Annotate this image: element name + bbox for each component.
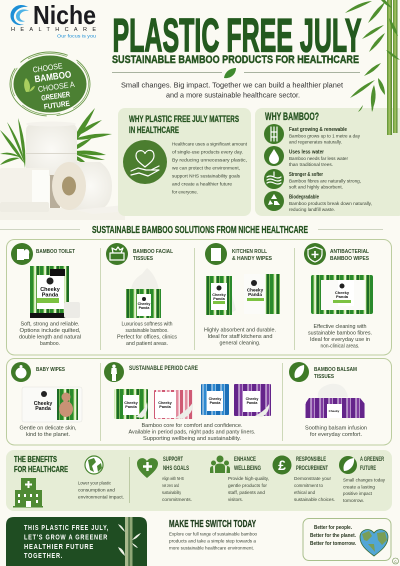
product: kitchen roll and handy wipes: Panda [213, 297, 226, 301]
product: bamboo facial tissues [106, 243, 178, 347]
logo: Niche Healthcare [10, 0, 97, 38]
logo: Niche Healthcare: HEALTHCARE [11, 27, 96, 33]
body text: we can protect the environment, [172, 166, 240, 172]
product: bamboo toilet: Cheeky [40, 287, 61, 293]
product: antibacterial bamboo wipes: Cheeky [335, 290, 350, 295]
benefit: stronger and softer: Stronger & softer [289, 172, 323, 178]
panel: why bamboo [255, 108, 400, 216]
product: kitchen roll and handy wipes [204, 243, 280, 346]
benefit: a greener future: Small changes today [343, 478, 386, 484]
product: antibacterial bamboo wipes: Effective cleaning with [314, 324, 367, 330]
benefit: biodegradable: reducing landfill waste. [289, 207, 335, 213]
heading: FOR HEALTHCARE [14, 464, 68, 474]
product: kitchen roll and handy wipes: Highly absorbent and durable. [204, 328, 276, 334]
product: sustainable period care: Bamboo core for comfort and confidence. [142, 423, 242, 429]
product: antibacterial bamboo wipes: BAMBOO WIPES [330, 256, 369, 262]
product: bamboo facial tissues: BAMBOO FACIAL [133, 249, 173, 255]
benefit: a greener future [339, 456, 386, 504]
benefit: support NHS goals: sustainability [162, 490, 181, 496]
intro text: Small changes. Big impact. Together we can build a healthier planet [121, 82, 343, 90]
bamboo leaves behind rolls [0, 108, 112, 168]
benefit: a greener future: tomorrow. [343, 498, 364, 504]
product: sustainable period care: Panda [125, 405, 138, 409]
benefit: biodegradable: Biodegradable [289, 194, 319, 200]
icon: heart globe [360, 530, 388, 556]
callout: better for people: Better for the planet. [310, 533, 357, 539]
callout: better for people: Better for people. [314, 525, 353, 531]
icon: hospital [13, 478, 43, 508]
make the switch today: products and take a simple step towards a [169, 538, 256, 544]
heading: THE BENEFITS [14, 454, 57, 464]
title divider with leaf [112, 68, 360, 78]
product: antibacterial bamboo wipes: Panda [336, 294, 349, 299]
benefit: fast growing: Fast growing & renewable [289, 127, 347, 133]
benefit: enhance wellbeing: WELLBEING [234, 466, 261, 472]
benefit: a greener future: FUTURE [360, 466, 376, 472]
product: bamboo toilet: Options include quilted, [20, 328, 80, 334]
benefit: fast growing: and regenerates naturally. [289, 140, 342, 146]
product: bamboo facial tissues: Cheeky [138, 302, 150, 306]
product: antibacterial bamboo wipes: Ideal for everyday use in [310, 337, 370, 343]
product: sustainable period care: Panda [210, 401, 221, 405]
badge: choose bamboo: GREENER [41, 90, 71, 103]
benefit text: planet [78, 480, 124, 500]
product: baby wipes: Cheeky [34, 401, 52, 407]
product: sustainable period care: Supporting wellbeing and sustainability. [143, 436, 241, 442]
product: bamboo toilet: Panda [42, 292, 59, 298]
benefit text: planet: consumption and [78, 488, 115, 494]
benefit: biodegradable [264, 191, 372, 213]
benefit: stronger and softer [264, 169, 361, 190]
panel: why plastic free July matters [118, 108, 251, 216]
product: sustainable period care: Cheeky [246, 397, 258, 401]
product: sustainable period care: Available in period pads, night pads and panty liners. [128, 430, 256, 436]
product: bamboo facial tissues: TISSUES [133, 256, 153, 262]
callout: better for people: Better for tomorrow. [310, 541, 357, 547]
product: bamboo facial tissues: Panda [139, 306, 150, 310]
product: sustainable period care [104, 362, 271, 442]
call to action text: LET'S GROW A GREENER [24, 534, 108, 542]
benefit: uses less water: than traditional trees. [289, 162, 333, 168]
badge: choose bamboo: BAMBOO [34, 69, 72, 85]
product: sustainable period care: Cheeky [209, 397, 221, 401]
benefit: support NHS goals: NHS GOALS [163, 466, 189, 472]
product: bamboo facial tissues: Perfect for offices, clinics [117, 334, 178, 340]
benefit: responsible procurement: PROCUREMENT [296, 466, 328, 472]
benefit: responsible procurement: ethical and [294, 490, 315, 496]
copyright mark [392, 558, 398, 564]
product: baby wipes: Panda [35, 406, 51, 412]
heading [129, 114, 239, 136]
benefit: enhance wellbeing: staff, patients and [228, 490, 265, 496]
product: sustainable period care: Panda [247, 401, 258, 405]
benefit: uses less water: Bamboo needs far less water [289, 156, 348, 162]
benefit: a greener future: A GREENER [360, 457, 384, 463]
product: kitchen roll and handy wipes: Cheeky [247, 288, 264, 292]
body text: Healthcare uses a significant amount [172, 142, 248, 148]
callout: better for people [303, 518, 391, 560]
product: bamboo toilet: Soft, strong and reliable. [20, 322, 80, 328]
benefit text: planet: environmental impact. [78, 494, 124, 500]
body text: of single-use products every day. [172, 150, 243, 156]
benefit: uses less water: Uses less water [289, 150, 324, 156]
product: bamboo balsam tissues: Soothing balsam infusion [305, 426, 367, 432]
product: sustainable period care: Cheeky [158, 401, 173, 405]
body text [172, 142, 248, 196]
benefit: responsible procurement: commitment to [294, 483, 323, 489]
product: bamboo balsam tissues: TISSUES [314, 374, 334, 380]
product: kitchen roll and handy wipes: general cleaning. [220, 340, 260, 346]
heading: WHY PLASTIC FREE JULY MATTERS [129, 114, 239, 125]
intro text [121, 82, 343, 100]
bamboo on dark panel [118, 517, 141, 566]
product: sustainable period care: Cheeky [124, 401, 139, 405]
call to action text [24, 525, 109, 560]
logo: Niche Healthcare: Our focus is you [57, 34, 97, 38]
benefit: a greener future: positive impact [343, 491, 373, 497]
product: antibacterial bamboo wipes: ANTIBACTERIAL [330, 249, 369, 255]
product: kitchen roll and handy wipes: Ideal for staff kitchens and [208, 334, 273, 340]
benefit: support NHS goals: SUPPORT [163, 457, 183, 463]
logo: Niche Healthcare: Niche [33, 0, 96, 30]
product: baby wipes: BABY WIPES [36, 367, 65, 373]
panel: product row 1 [6, 240, 392, 355]
heading: WHY BAMBOO? [265, 111, 319, 123]
benefit: support NHS goals [137, 457, 192, 503]
make the switch today: more sustainable healthcare environment. [169, 546, 254, 552]
body text: and create a healthier future [172, 182, 232, 188]
heading: IN HEALTHCARE [129, 125, 179, 136]
bamboo top right [345, 0, 400, 135]
benefit: fast growing: Bamboo grows up to 1 metre a day [289, 134, 361, 140]
benefit: uses less water [264, 146, 348, 168]
product: antibacterial bamboo wipes: non-clinical areas. [320, 344, 360, 350]
benefit: responsible procurement: sustainable choices. [294, 497, 335, 503]
benefit: enhance wellbeing: ENHANCE [234, 457, 256, 463]
icon: heart in hand [123, 140, 167, 184]
benefit text: planet: Lower your plastic [78, 480, 112, 486]
product: sustainable period care: Panda [159, 405, 172, 409]
call to action text: HEALTHIER FUTURE [24, 544, 94, 551]
product: bamboo balsam tissues: for everyday comfort. [310, 432, 362, 438]
product: bamboo toilet [11, 243, 81, 347]
copyright mark: c [394, 559, 397, 564]
product: kitchen roll and handy wipes: KITCHEN ROLL [232, 249, 267, 255]
icon: globe [85, 456, 103, 474]
benefit: a greener future: create a lasting [343, 484, 375, 490]
badge: choose bamboo: CHOOSE A [37, 80, 76, 94]
benefit: enhance wellbeing: visitors. [228, 497, 243, 503]
product: antibacterial bamboo wipes: sustainable bamboo fibres. [308, 330, 372, 336]
product: antibacterial bamboo wipes [304, 243, 373, 350]
product: kitchen roll and handy wipes: Cheeky [212, 293, 227, 297]
body text: for everyone. [172, 190, 198, 196]
badge: choose bamboo [10, 52, 90, 116]
panel: product row 2 [6, 358, 392, 445]
product: bamboo facial tissues: sustainable bamboo. [126, 328, 168, 334]
product: baby wipes [11, 362, 82, 438]
product: bamboo facial tissues: and patient areas. [126, 341, 168, 347]
badge: choose bamboo: FUTURE [43, 99, 70, 111]
benefit: responsible procurement: RESPONSIBLE [296, 457, 326, 463]
benefit: support NHS goals: commitments. [162, 497, 192, 503]
product: bamboo balsam tissues: BAMBOO BALSAM [314, 367, 357, 373]
call to action text: THIS PLASTIC FREE JULY, [24, 525, 109, 532]
call to action text: TOGETHER. [24, 553, 63, 560]
benefit: stronger and softer: Bamboo fibres are naturally strong, [289, 178, 361, 184]
benefit: responsible procurement: £ [278, 457, 286, 473]
benefit: stronger and softer: soft and highly absorbent. [289, 184, 343, 190]
benefit: support NHS goals: Align with NHS [162, 476, 184, 482]
intro text: and a more sustainable healthcare sector. [166, 92, 300, 100]
benefit: enhance wellbeing: Provide high-quality, [228, 476, 269, 482]
product: baby wipes: Gentle on delicate skin, [20, 426, 76, 432]
product: kitchen roll and handy wipes: & HANDY WIPES [232, 256, 272, 262]
product: bamboo toilet: BAMBOO TOILET [36, 249, 75, 255]
benefit: enhance wellbeing [210, 456, 269, 503]
make the switch today: MAKE THE SWITCH TODAY [169, 518, 256, 530]
paper rolls and tissue stack [0, 122, 125, 220]
panel: benefits for healthcare [6, 450, 392, 511]
panel: this plastic free July call to action [6, 517, 147, 566]
heading [14, 454, 68, 474]
benefit: fast growing [264, 124, 361, 146]
benefit: biodegradable: Bamboo products break down naturally, [289, 201, 372, 207]
benefit: support NHS goals: net zero and [162, 483, 179, 489]
make the switch today: Explore our full range of sustainable bamboo [169, 532, 257, 538]
benefit: enhance wellbeing: gentle products for [228, 483, 267, 489]
product: sustainable period care: SUSTAINABLE PERIOD CARE [129, 366, 198, 372]
body text: support NHS sustainability goals [172, 174, 241, 180]
product: bamboo balsam tissues: Cheeky [329, 409, 340, 413]
product: baby wipes: kind to the planet. [26, 432, 70, 438]
product: kitchen roll and handy wipes: Panda [248, 292, 262, 297]
product: bamboo toilet: bamboo. [40, 341, 60, 347]
benefit: responsible procurement: Demonstrate your [294, 476, 331, 482]
body text: By reducing unnecessary plastic, [172, 158, 247, 164]
benefit: responsible procurement [272, 456, 335, 503]
product: bamboo toilet: double length and natural [19, 334, 81, 340]
product: bamboo facial tissues: Luxurious softness with [122, 322, 173, 328]
product: bamboo balsam tissues [289, 362, 367, 438]
badge: choose bamboo: CHOOSE [32, 61, 63, 74]
make the switch today [169, 518, 257, 552]
